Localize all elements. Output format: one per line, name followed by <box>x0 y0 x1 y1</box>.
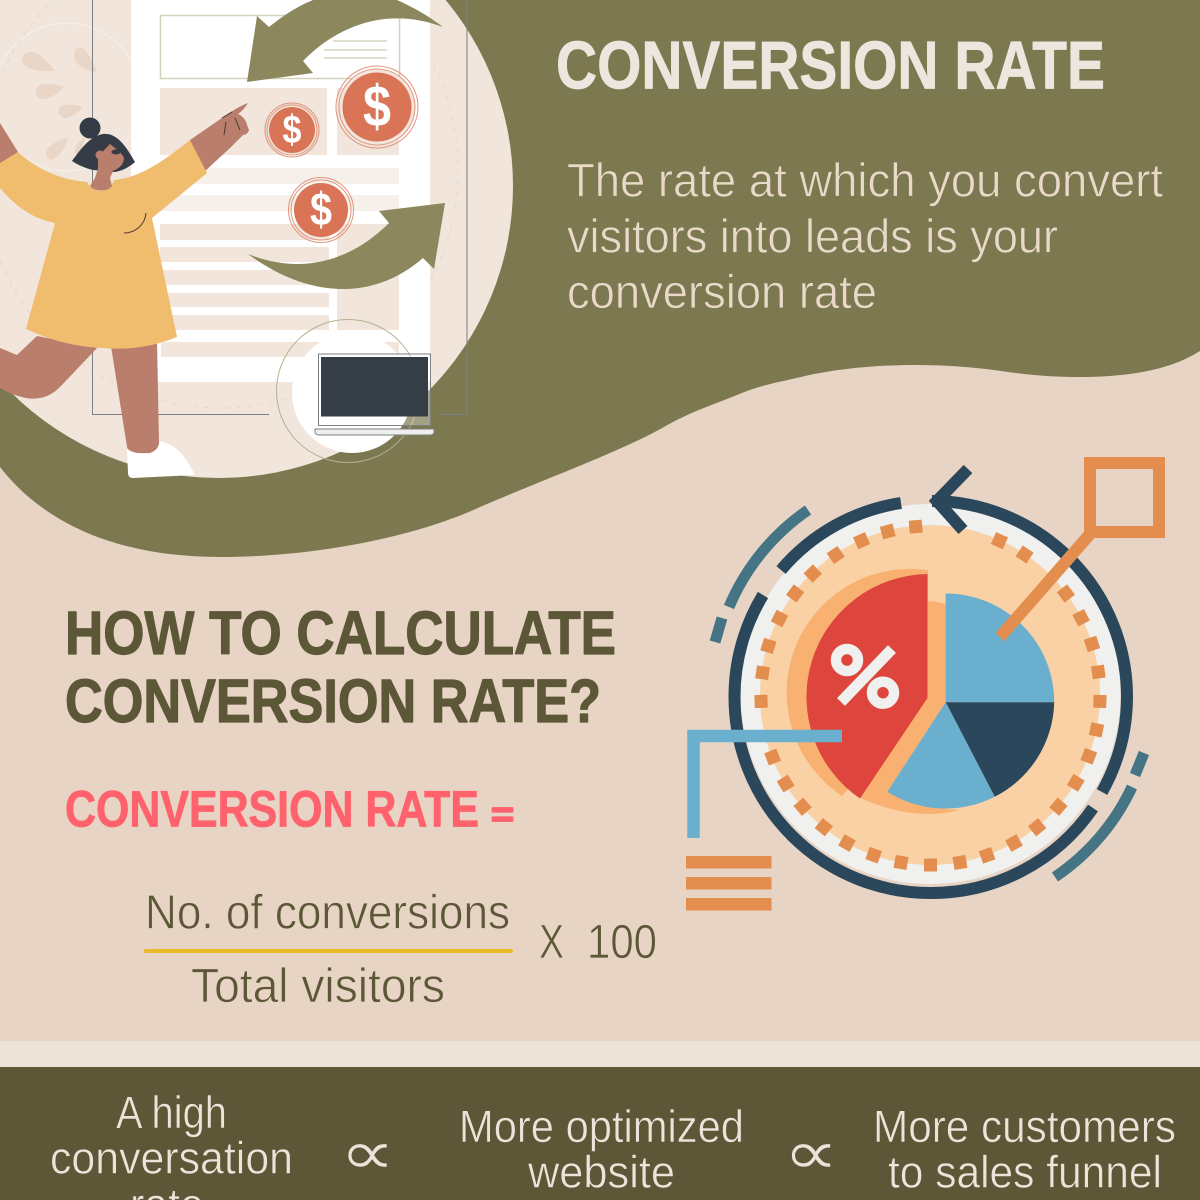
description: The rate at which you convert <box>567 154 1163 206</box>
dashes <box>754 520 1107 872</box>
hair bun <box>80 118 100 138</box>
arrow: bottom curved <box>248 203 445 289</box>
decorative leaves <box>0 23 141 171</box>
footer text: high conversion <box>50 1087 293 1200</box>
rings <box>740 504 1120 884</box>
footer text: customers <box>873 1101 1176 1198</box>
percent icon <box>836 649 894 704</box>
formula <box>144 886 657 1013</box>
formula: Total visitors <box>191 960 445 1013</box>
footer text: high conversion: conversation <box>50 1132 293 1184</box>
dashed orbit circle <box>0 0 458 408</box>
formula: No. of conversions <box>145 886 510 940</box>
heading: how to calculate <box>65 599 616 735</box>
coin: small: $ <box>282 108 302 152</box>
coin: medium: $ <box>310 183 332 235</box>
proportional symbol: ∝ <box>783 1118 839 1187</box>
formula label: CONVERSION RATE <box>65 780 479 838</box>
teal arcs <box>715 510 1144 877</box>
cream band <box>0 1041 1200 1067</box>
web page <box>131 0 430 382</box>
outer dark ring segments <box>734 469 1127 893</box>
neck and face <box>90 144 124 190</box>
title: CONVERSION RATE <box>556 28 1105 104</box>
footer text: optimized: More optimized <box>459 1101 744 1152</box>
heading: how to calculate: HOW TO CALCULATE <box>65 599 616 667</box>
footer text: optimized: website <box>527 1146 675 1198</box>
formula: X <box>539 916 564 969</box>
description: visitors into leads is your <box>567 210 1058 262</box>
red slice <box>806 574 928 798</box>
coin: large: $ <box>363 74 391 139</box>
orange under-pie <box>787 569 928 796</box>
footer text: high conversion: A high <box>116 1087 227 1138</box>
footer text: customers: More customers <box>873 1101 1176 1152</box>
heading: how to calculate: CONVERSION RATE? <box>65 667 601 735</box>
blue slice top <box>946 594 1054 702</box>
olive wave header background <box>0 0 1200 557</box>
woman <box>0 103 249 478</box>
pie chart graphic <box>686 463 1159 910</box>
footer text: optimized <box>459 1101 744 1198</box>
description <box>567 154 1163 318</box>
coin: large <box>336 66 418 148</box>
coin: small <box>265 103 319 157</box>
formula label: = <box>491 796 514 834</box>
illustration: woman and web page <box>0 0 513 478</box>
coin: medium <box>288 178 354 242</box>
blue slice bottom <box>887 702 995 809</box>
footer text: customers: to sales funnel <box>888 1146 1162 1198</box>
proportional symbol: ∝ <box>340 1118 395 1187</box>
cream circle backdrop <box>0 0 513 478</box>
hair <box>72 134 135 172</box>
blue corner bracket <box>694 736 842 838</box>
laptop <box>276 320 434 462</box>
orange bars <box>686 856 772 910</box>
page frame lines <box>92 0 467 414</box>
formula: 100 <box>587 916 657 969</box>
dark slice <box>946 702 1054 797</box>
orange square pointer <box>1000 463 1159 637</box>
footer panel <box>0 1067 1200 1200</box>
description: conversion rate <box>567 265 877 318</box>
arrow: top curved <box>247 0 443 82</box>
